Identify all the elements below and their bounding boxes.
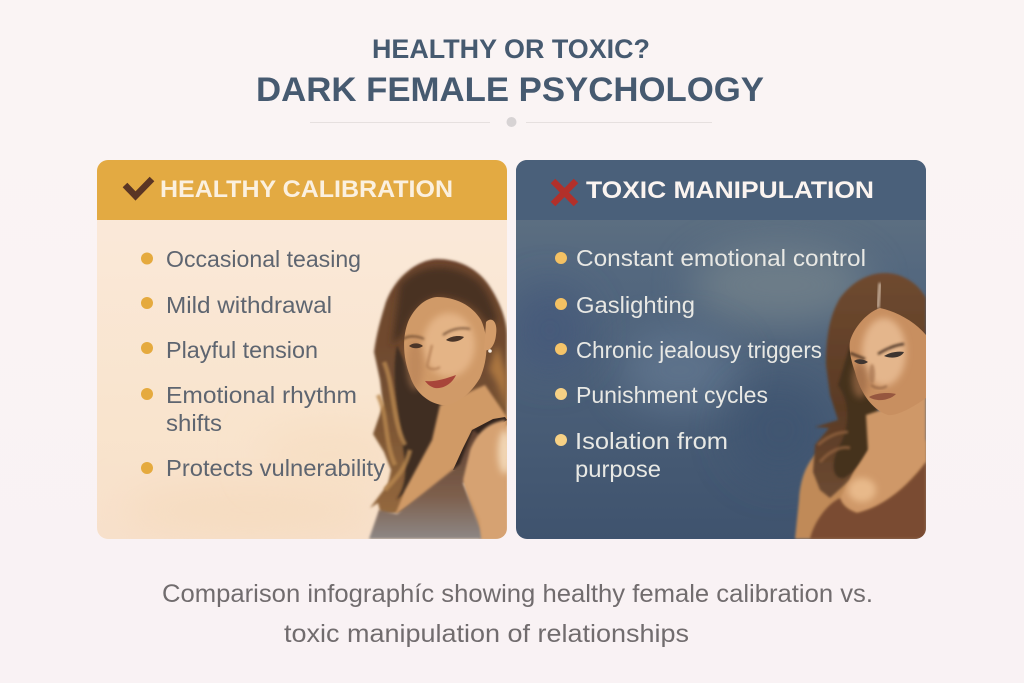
panel: toxic manipulation (510, 160, 926, 539)
bullet: mild withdrawal: Mild withdrawal (166, 292, 332, 318)
panel background warm (97, 220, 507, 539)
bullet: isolation from purpose: Isolation from (575, 428, 728, 454)
bullet: punishment cycles: Punishment cycles (576, 382, 768, 408)
bullet: playful tension: Playful tension (166, 337, 318, 363)
panel heading: HEALTHY CALIBRATION (160, 176, 453, 203)
panel header bar (516, 160, 926, 220)
bullet: emotional rhythm shifts: shifts (166, 410, 222, 436)
panel header bar (97, 160, 507, 220)
bullet: isolation from purpose (555, 428, 728, 482)
bullet: isolation from purpose: purpose (575, 456, 661, 482)
title line 1: HEALTHY OR TOXIC? (372, 34, 650, 64)
panel background cool (516, 160, 926, 539)
icon: check mark (125, 179, 152, 196)
bullet: chronic jealousy triggers: Chronic jealousy triggers (576, 337, 822, 363)
caption line 2: toxic manipulation of relationships (284, 620, 689, 648)
caption (162, 580, 873, 648)
bullet: gaslighting: Gaslighting (576, 292, 695, 318)
bullet: emotional rhythm shifts: Emotional rhythm (166, 382, 357, 408)
bullet list: toxic (555, 245, 866, 482)
caption line 1: Comparison infographíc showing healthy female calibration vs. (162, 580, 873, 608)
icon: red cross (553, 181, 576, 204)
bullet: occasional teasing: Occasional teasing (166, 246, 361, 272)
infographic canvas (97, 39, 926, 647)
divider ornament (506, 117, 516, 127)
title line 2: DARK FEMALE PSYCHOLOGY (256, 71, 764, 109)
bullet: protects vulnerability: Protects vulnerability (166, 455, 386, 481)
bullet: constant emotional control: Constant emotional control (576, 245, 866, 271)
heading block (256, 34, 764, 109)
portrait: frowning woman (795, 273, 926, 539)
panel heading: TOXIC MANIPULATION (586, 177, 874, 204)
portrait: smiling woman (369, 259, 512, 539)
panel: healthy calibration (97, 160, 512, 539)
bullet: emotional rhythm shifts (141, 382, 357, 436)
bullet list: healthy (141, 246, 386, 481)
